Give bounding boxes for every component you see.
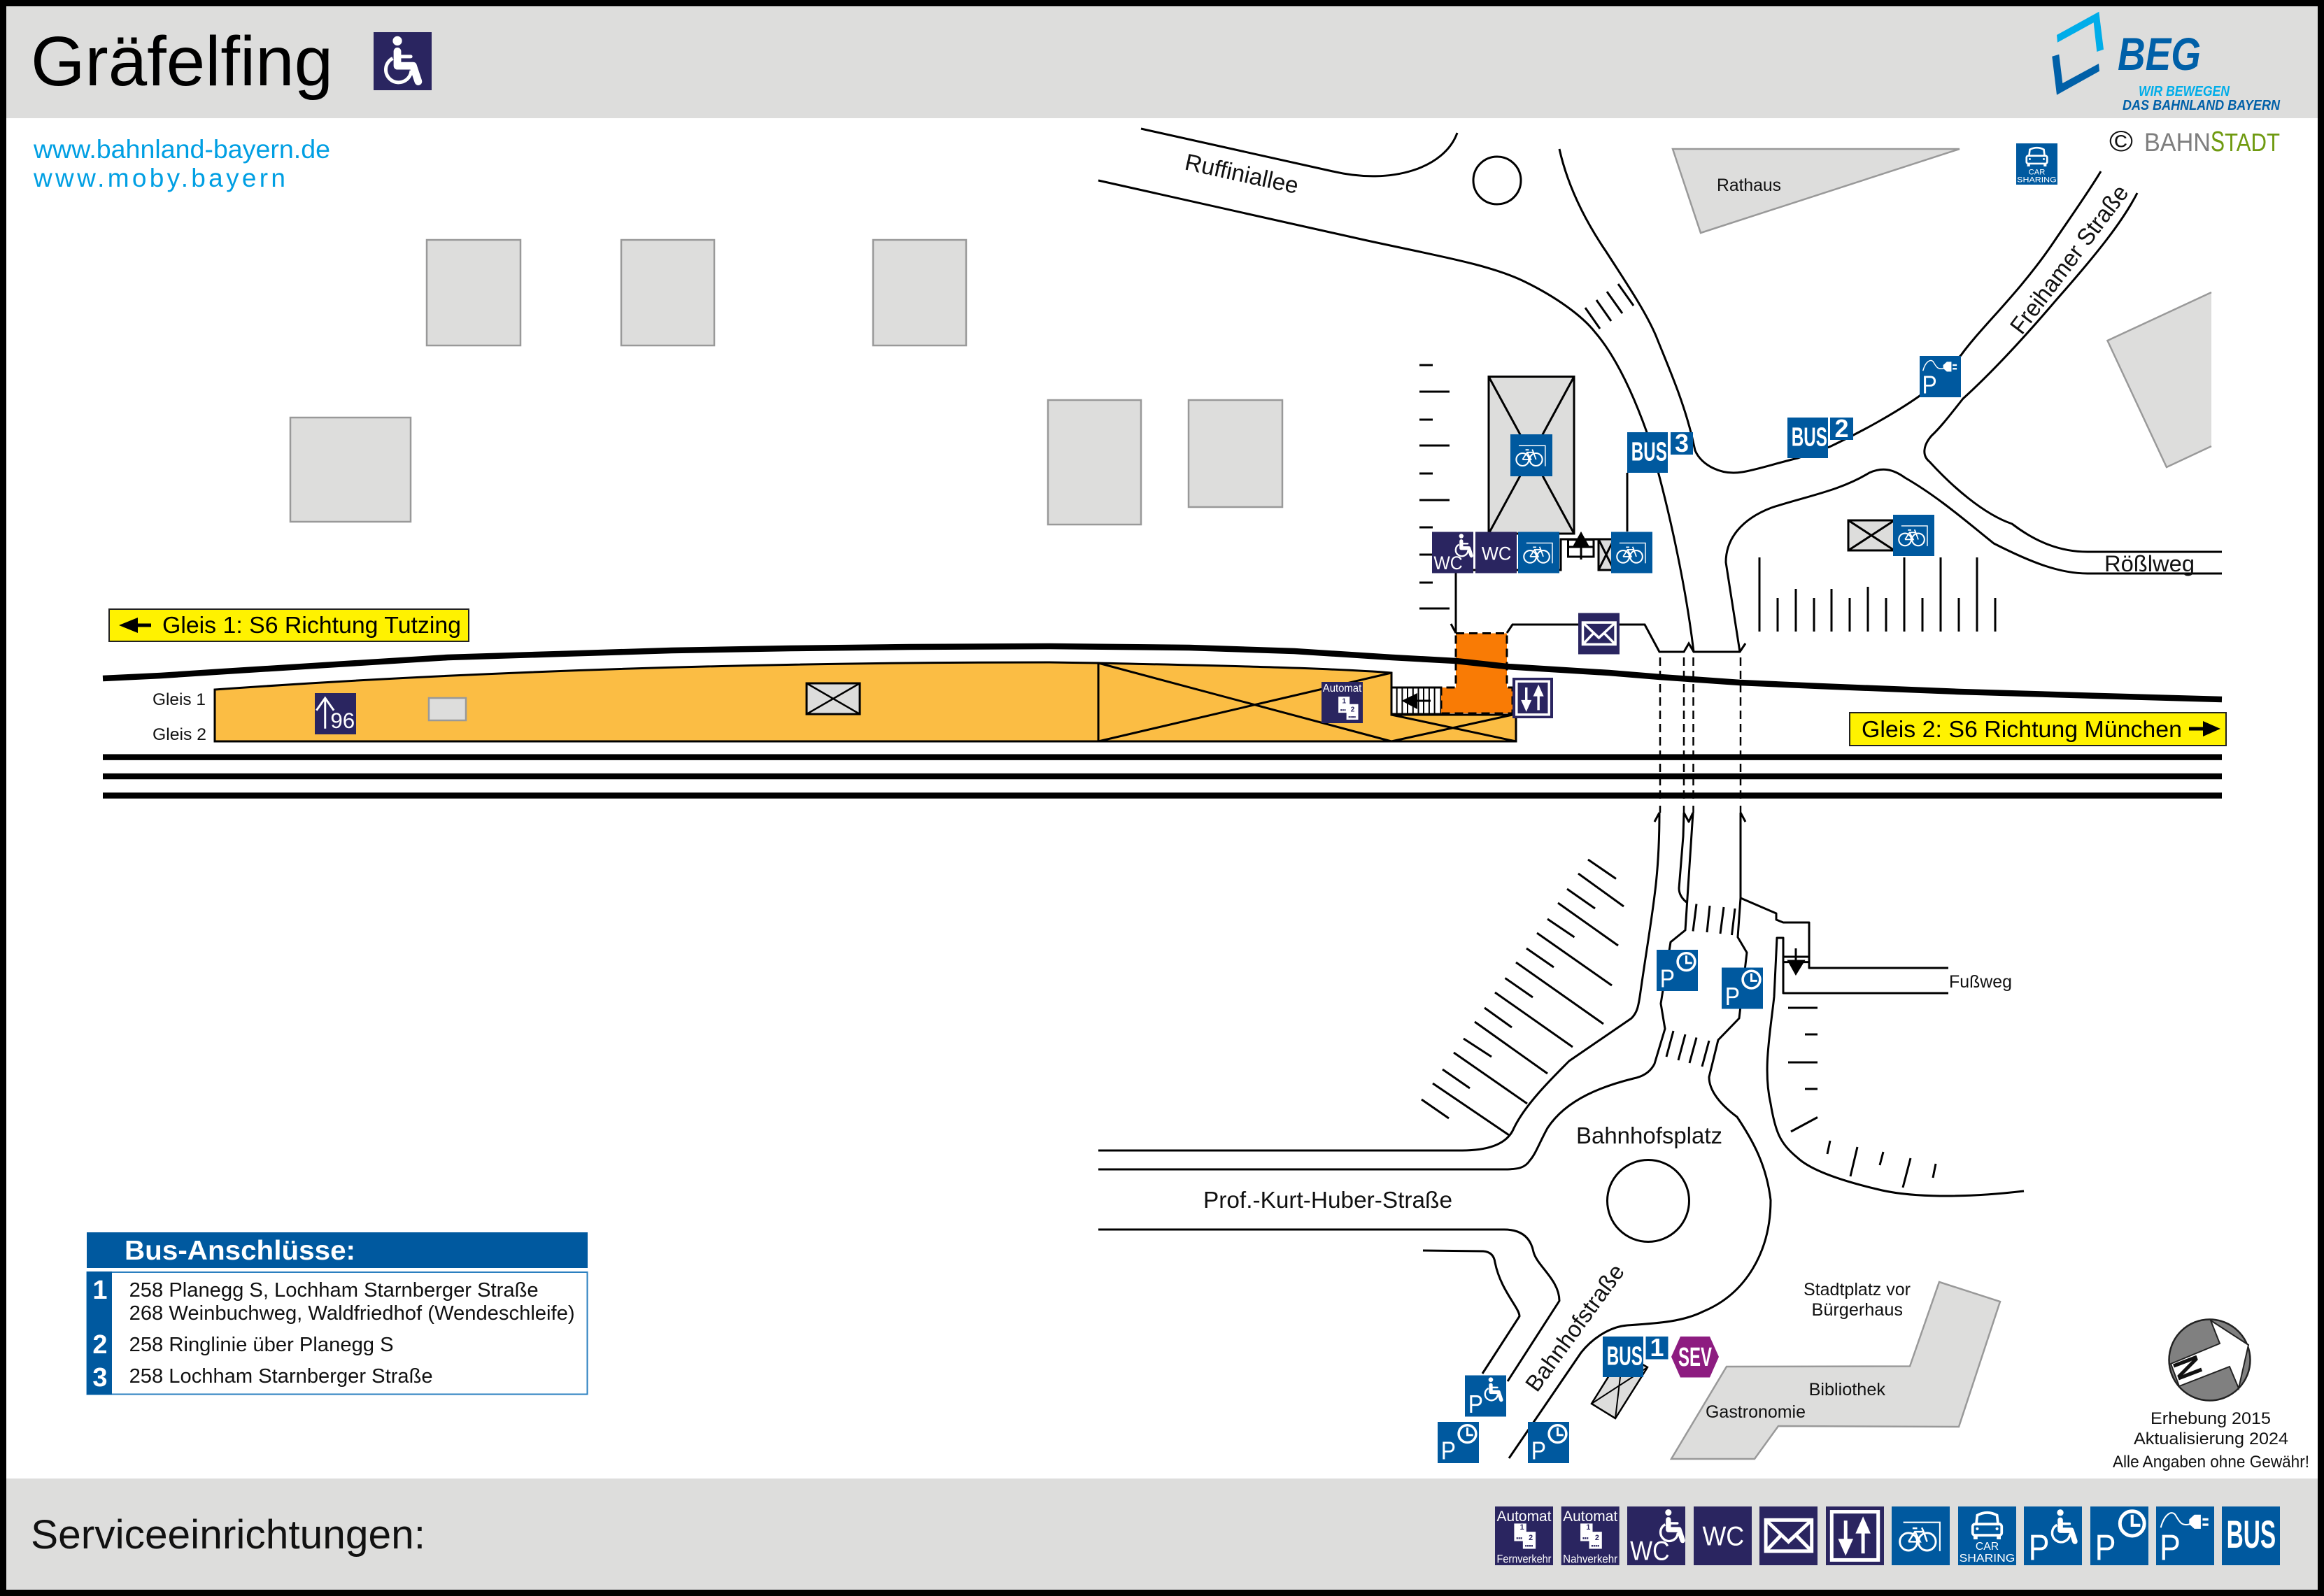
icon: electric charging parking map: P [1922,371,1937,399]
survey note [2113,1409,2309,1472]
legend: ticket machine regional: Nahverkehr [1563,1553,1618,1566]
legend: bike parking [1892,1506,1950,1565]
street names: Bahnhofstraße [1520,1259,1629,1396]
bus line numbers [87,1271,112,1395]
underpass orange [1441,634,1512,713]
street names: Fußweg [1949,972,2012,992]
icon: platform height 96: 96 [330,708,355,733]
icon: accessible WC: WC [1433,552,1463,573]
bike shelter building [1489,376,1574,534]
legend: car sharing: SHARING [1960,1553,2015,1565]
icon: bus stop 2: BUS [1792,422,1827,453]
copyright BahnStadt [2109,124,2280,157]
icon: short-term parking right [1528,1422,1569,1465]
copyright BahnStadt: S [2211,125,2225,157]
shelter near Rößlweg [1848,520,1894,550]
icon: bus stop 2: 2 [1834,414,1849,443]
street names: Ruffiniallee [1182,150,1301,199]
legend: mailbox [1759,1506,1818,1565]
legend: car sharing [1958,1506,2016,1565]
bus line numbers: 1 [92,1276,108,1305]
icon: ticket machine on platform [1322,682,1363,723]
legend: WC [1694,1506,1752,1565]
icon: accessible WC [1432,532,1473,573]
bus line text: 258 Planegg S, Lochham Starnberger Straße [129,1279,539,1302]
place names: Bibliothek [1809,1380,1885,1399]
north arrow [2164,1319,2250,1400]
bus line numbers: 3 [92,1363,108,1392]
legend: electric charging: P [2160,1527,2181,1568]
bus line numbers: 2 [92,1330,108,1360]
legend: ticket machine regional [1561,1506,1620,1566]
platform small building [429,698,466,720]
icon: ticket machine on platform: 1 [1342,697,1347,705]
place names: Bürgerhaus [1812,1300,1903,1320]
icon: WC: WC [1482,543,1511,564]
BEG logo [2052,12,2280,113]
legend: WC: WC [1702,1521,1744,1551]
place names [1706,1280,1911,1422]
bus line text: 258 Lochham Starnberger Straße [129,1365,433,1388]
icon: electric charging parking map [1920,356,1961,399]
icon: mailbox [1578,613,1620,655]
icon: WC [1475,532,1517,573]
icon: ticket machine on platform: Automat [1323,683,1362,694]
street names [1182,150,2195,1396]
legend: ticket machine regional: 2 [1595,1534,1599,1542]
icon: bus stop 3 [1627,429,1693,473]
direction label Gleis 2 [1850,713,2226,746]
icon: bus stop 3: BUS [1631,437,1667,467]
legend: electric charging [2156,1506,2214,1568]
parking and crossing ticks [1419,284,1995,1188]
icon: bus stop 3: 3 [1675,429,1689,457]
direction label Gleis 1: Gleis 1: S6 Richtung Tutzing [162,612,461,639]
icon: bus stop 1: 1 [1650,1333,1664,1362]
platform labels: Gleis 1 [153,690,206,709]
icon: SEV replacement service: SEV [1678,1343,1712,1372]
legend: ticket machine long distance [1495,1506,1553,1566]
Rathaus building: Rathaus [1717,176,1781,195]
Rathaus building [1673,149,1960,233]
platform labels [153,690,206,744]
street names: Bahnhofsplatz [1576,1123,1722,1148]
header band [6,6,2318,118]
legend: ticket machine regional: Automat [1563,1509,1617,1525]
street names: Freihamer Straße [2005,180,2134,339]
bus line text: 268 Weinbuchweg, Waldfriedhof (Wendeschleife) [129,1302,575,1325]
icon: short-term parking right: P [1531,1437,1546,1465]
road network [1098,129,2222,1458]
legend: ticket machine long distance: 2 [1529,1534,1533,1542]
legend: car sharing: CAR [1976,1541,1999,1553]
icon: wheelchair accessible [374,32,432,90]
legend: accessible parking: P [2029,1527,2050,1568]
icon: lift [1512,678,1553,718]
icon: short-term parking left [1438,1422,1479,1465]
icon: bus stop 1 [1603,1333,1668,1377]
icon: accessible parking: P [1468,1390,1483,1418]
footer heading: Serviceeinrichtungen: [31,1512,425,1558]
survey note: Aktualisierung 2024 [2134,1430,2288,1448]
icon: SEV replacement service [1671,1337,1719,1378]
icon: bike parking Rößlweg [1893,515,1934,556]
underpass stairs [1391,687,1441,714]
direction label Gleis 2: Gleis 2: S6 Richtung München [1862,716,2182,743]
survey note: Erhebung 2015 [2151,1409,2271,1428]
street names: Rößlweg [2104,550,2195,576]
direction label Gleis 1 [109,609,469,641]
legend: accessible WC: WC [1630,1536,1670,1566]
copyright BahnStadt: TADT [2225,128,2280,157]
copyright BahnStadt: © [2109,124,2133,157]
BEG logo: BEG [2118,28,2201,80]
legend: lift [1826,1506,1884,1565]
legend: short-term parking: P [2095,1527,2116,1568]
panel: bus connections [87,1232,588,1395]
underpass dashed lines [1660,657,1741,813]
legend: bus [2222,1506,2280,1565]
bus shelter at stop 1 [1592,1353,1648,1418]
track 1 curved [103,646,2222,699]
icon: bike parking 1 [1518,532,1559,573]
legend: ticket machine regional: 1 [1586,1523,1590,1532]
icon: park and ride clock 2: P [1725,982,1740,1011]
icon: car sharing map: SHARING [2017,176,2057,184]
bus line text [129,1279,575,1388]
footer band [6,1479,2318,1590]
copyright BahnStadt: BAHN [2144,128,2211,157]
title: Gräfelfing [31,22,333,101]
place names: Stadtplatz vor [1804,1280,1911,1299]
icon: bus stop 1: BUS [1607,1341,1643,1371]
legend: ticket machine long distance: Automat [1496,1509,1552,1525]
icon: park and ride clock 1: P [1660,964,1675,993]
bus panel heading [87,1232,588,1268]
legend: short-term parking [2090,1506,2148,1568]
stairs to Fußweg [1783,948,1809,974]
legend: ticket machine long distance: 1 [1520,1523,1524,1532]
icon: platform height 96 [315,693,356,734]
icon: bike at shelter building [1510,434,1552,476]
place names: Gastronomie [1706,1402,1806,1422]
icon: accessible parking [1465,1375,1506,1418]
north arrow: N [2164,1351,2210,1385]
surrounding buildings [290,240,2211,1459]
platform labels: Gleis 2 [153,725,206,744]
bus panel heading: Bus-Anschlüsse: [125,1236,355,1266]
icon: ticket machine on platform: 2 [1351,706,1355,714]
icon: car sharing map [2016,143,2057,185]
legend: accessible parking [2024,1506,2082,1568]
icon: short-term parking left: P [1441,1437,1456,1465]
legend: bus: BUS [2227,1513,2276,1556]
icon: car sharing map: CAR [2029,168,2045,176]
icon: bus stop 2 [1787,414,1853,458]
web links: www.moby.bayern [33,164,285,192]
icon: park and ride clock 1 [1657,950,1698,993]
icon: bike parking 2 [1611,532,1652,573]
legend: accessible WC [1627,1506,1685,1566]
web links: www.bahnland-bayern.de [33,135,330,164]
survey note: Alle Angaben ohne Gewähr! [2113,1453,2309,1472]
legend: ticket machine long distance: Fernverkehr [1496,1553,1552,1566]
bus line text: 258 Ringlinie über Planegg S [129,1334,394,1356]
platform [215,662,1516,741]
web links [33,135,330,192]
station entrance structure [1451,473,1745,652]
straight tracks [103,757,2222,796]
street names: Prof.-Kurt-Huber-Straße [1203,1187,1452,1213]
platform shelter [807,683,860,714]
icon: park and ride clock 2 [1722,968,1763,1011]
BEG logo: WIR BEWEGEN [2139,84,2230,99]
BEG logo: DAS BAHNLAND BAYERN [2123,98,2280,113]
bus panel table frame [87,1272,588,1395]
